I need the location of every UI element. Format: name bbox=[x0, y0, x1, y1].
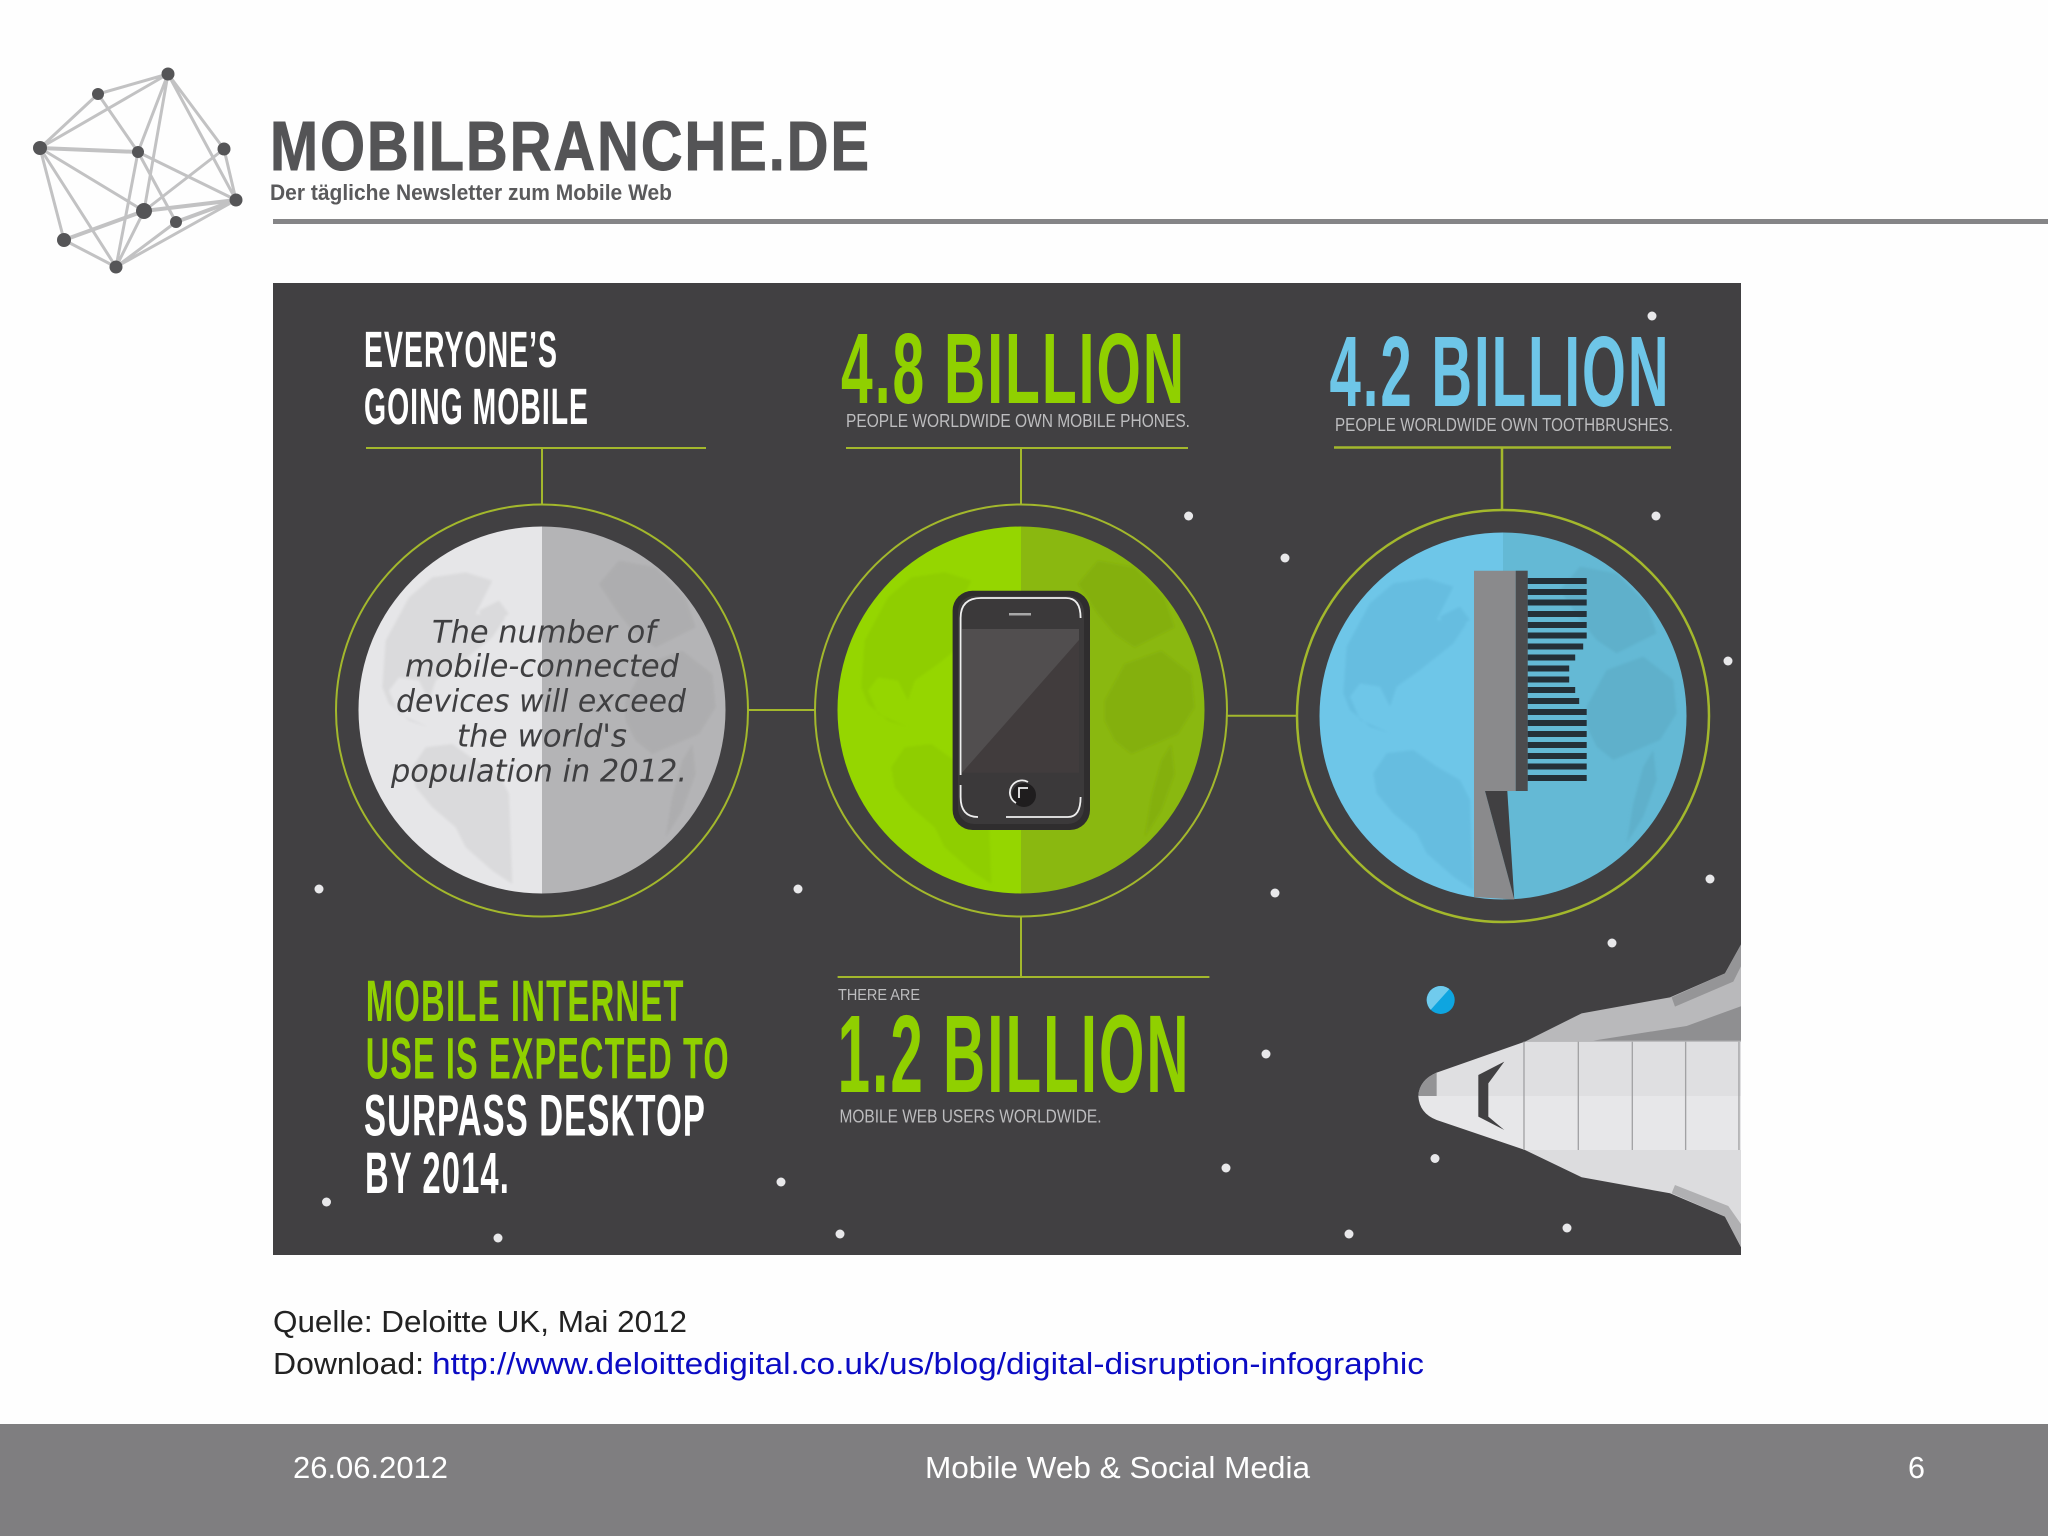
icon: smartphone bbox=[953, 591, 1090, 830]
logo tagline: Der tägliche Newsletter zum Mobile Web bbox=[270, 180, 672, 205]
icon: space shuttle bbox=[1418, 943, 1742, 1248]
heading: everyone's going mobile: GOING MOBILE bbox=[364, 378, 589, 435]
icon: blue planet bbox=[1426, 986, 1455, 1014]
footer page number: 6 bbox=[1908, 1450, 1925, 1485]
text block: moon caption bbox=[390, 615, 687, 790]
heading: everyone's going mobile: EVERYONE’S bbox=[364, 321, 558, 378]
text block: mobile internet forecast bbox=[365, 980, 728, 1194]
logo wordmark: MOBILBRANCHE.DE bbox=[270, 107, 871, 185]
connector lines bbox=[366, 448, 1671, 977]
footer title: Mobile Web & Social Media bbox=[925, 1450, 1311, 1485]
footer bar bbox=[0, 1424, 2048, 1536]
download link: http://www.deloittedigital.co.uk/us/blog/digital-disruption-infographic bbox=[432, 1346, 1424, 1381]
text block: moon caption: the world's bbox=[457, 719, 627, 755]
stat: 1.2 billion: 1.2 BILLION bbox=[838, 993, 1191, 1116]
heading: everyone's going mobile bbox=[365, 331, 587, 424]
globe: grey moon bbox=[350, 520, 732, 900]
stat: 1.2 billion bbox=[838, 987, 1191, 1127]
stars bbox=[314, 312, 1732, 1242]
header rule bbox=[273, 219, 2048, 224]
stat: 4.2 billion: PEOPLE WORLDWIDE OWN TOOTHBRUSHES. bbox=[1335, 415, 1673, 435]
ring: middle globe bbox=[815, 504, 1227, 916]
stat: 1.2 billion: THERE ARE bbox=[838, 987, 920, 1004]
text block: moon caption: population in 2012. bbox=[390, 754, 687, 790]
stat: 4.8 billion: PEOPLE WORLDWIDE OWN MOBILE PHONES. bbox=[846, 411, 1190, 431]
text block: moon caption: devices will exceed bbox=[396, 684, 686, 720]
ring: right globe bbox=[1297, 510, 1709, 922]
panel: infographic bbox=[273, 283, 1742, 1255]
stat: 4.8 billion bbox=[842, 333, 1188, 427]
stat: 4.8 billion: 4.8 BILLION bbox=[841, 313, 1186, 425]
globe: blue earth bbox=[1310, 526, 1693, 906]
text block: mobile internet forecast: USE IS EXPECTED TO bbox=[366, 1026, 730, 1091]
stat: 4.2 billion bbox=[1330, 336, 1672, 431]
text block: mobile internet forecast: BY 2014. bbox=[365, 1141, 510, 1206]
text block: moon caption: The number of bbox=[432, 615, 660, 651]
text block: moon caption: mobile-connected bbox=[405, 649, 679, 685]
icon: network logo bbox=[33, 68, 242, 274]
ring: left globe bbox=[336, 504, 748, 916]
stat: 4.2 billion: 4.2 BILLION bbox=[1330, 316, 1670, 428]
text block: mobile internet forecast: SURPASS DESKTOP bbox=[364, 1084, 706, 1149]
stat: 1.2 billion: MOBILE WEB USERS WORLDWIDE. bbox=[840, 1107, 1102, 1127]
icon: toothbrush bbox=[1474, 571, 1587, 900]
text block: mobile internet forecast: MOBILE INTERNET bbox=[366, 969, 685, 1034]
download label: Download: bbox=[273, 1346, 424, 1381]
source line: Quelle: Deloitte UK, Mai 2012 bbox=[273, 1304, 687, 1339]
footer date: 26.06.2012 bbox=[293, 1450, 448, 1485]
globe: green earth bbox=[830, 520, 1211, 900]
